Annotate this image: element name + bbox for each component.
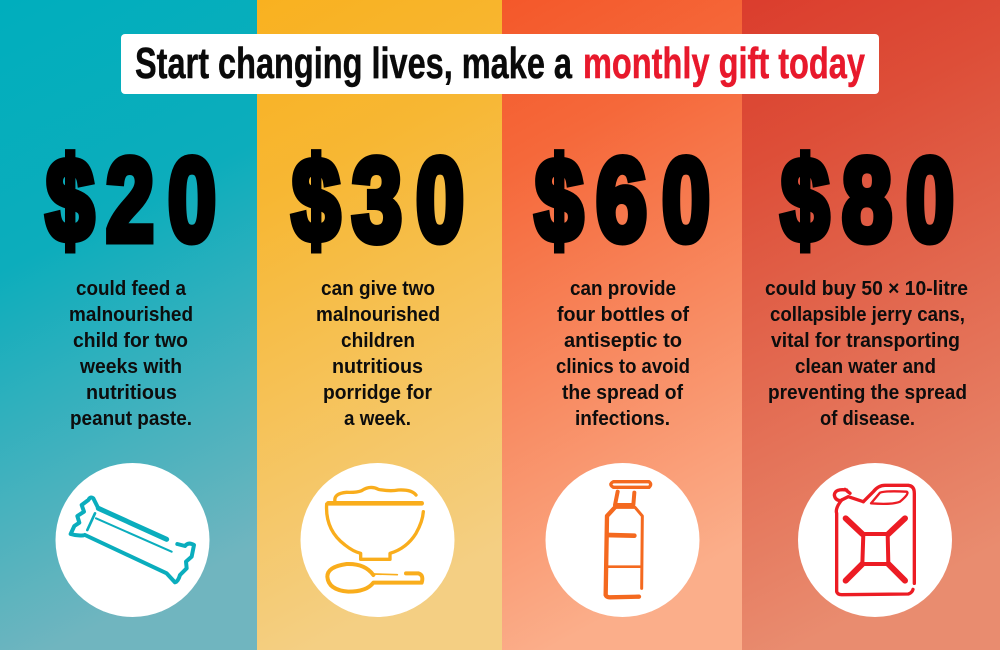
amount: $80 bbox=[781, 134, 954, 266]
text block: $80 description: clean water and bbox=[795, 356, 936, 378]
text block: $20 description: weeks with bbox=[79, 356, 182, 378]
title banner bbox=[121, 34, 879, 94]
panel: $30 column background bbox=[257, 0, 502, 650]
icon: jerry can bbox=[798, 463, 952, 617]
text block: $80 description: could buy 50 × 10-litre bbox=[765, 278, 968, 300]
text block: $80 description: vital for transporting bbox=[771, 330, 960, 352]
text block: $30 description: porridge for bbox=[323, 382, 432, 404]
amount: $30: $ bbox=[292, 134, 340, 266]
text block: $60 description: the spread of bbox=[562, 382, 683, 404]
amount: $20 bbox=[46, 134, 216, 266]
text block: $60 description bbox=[556, 278, 690, 430]
text block: $30 description: nutritious bbox=[332, 356, 423, 378]
text block: $20 description: peanut paste. bbox=[70, 408, 192, 430]
amount: $30 bbox=[292, 134, 464, 266]
amount: $30: 3 bbox=[352, 134, 402, 266]
panel: $60 column background bbox=[502, 0, 742, 650]
amount: $30: 0 bbox=[416, 134, 464, 266]
amount: $80: 8 bbox=[842, 134, 892, 266]
amount: $60: 6 bbox=[596, 134, 647, 266]
text block: $80 description: of disease. bbox=[820, 408, 915, 430]
text block: $80 description bbox=[765, 278, 968, 430]
icon: antiseptic bottle bbox=[546, 463, 700, 617]
icon: porridge bowl and spoon bbox=[300, 463, 454, 617]
text block: $80 description: collapsible jerry cans, bbox=[770, 304, 965, 326]
panel: $80 column background bbox=[742, 0, 1000, 650]
text block: $60 description: clinics to avoid bbox=[556, 356, 690, 378]
text block: $30 description: a week. bbox=[344, 408, 411, 430]
text block: $30 description: children bbox=[341, 330, 415, 352]
panel: $20 column background bbox=[0, 0, 257, 650]
text block: $20 description: malnourished bbox=[69, 304, 193, 326]
text block: $20 description: nutritious bbox=[86, 382, 177, 404]
text block: $60 description: four bottles of bbox=[557, 304, 689, 326]
text block: $60 description: antiseptic to bbox=[564, 330, 682, 352]
amount: $20: 2 bbox=[106, 134, 154, 266]
text block: $20 description bbox=[69, 278, 193, 430]
amount: $60: 0 bbox=[662, 134, 710, 266]
icon: peanut paste bar bbox=[56, 463, 210, 617]
title banner: monthly gift today bbox=[583, 39, 865, 88]
title banner: Start changing lives, make a bbox=[135, 39, 572, 88]
text block: $60 description: infections. bbox=[575, 408, 670, 430]
amount: $20: 0 bbox=[168, 134, 216, 266]
amount: $20: $ bbox=[46, 134, 94, 266]
text block: $30 description: can give two bbox=[321, 278, 435, 300]
text block: $30 description bbox=[316, 278, 440, 430]
text block: $20 description: could feed a bbox=[76, 278, 187, 300]
amount: $80: 0 bbox=[906, 134, 954, 266]
text block: $20 description: child for two bbox=[73, 330, 188, 352]
amount: $60 bbox=[535, 134, 710, 266]
text block: $80 description: preventing the spread bbox=[768, 382, 967, 404]
amount: $60: $ bbox=[535, 134, 583, 266]
text block: $60 description: can provide bbox=[570, 278, 676, 300]
amount: $80: $ bbox=[781, 134, 829, 266]
text block: $30 description: malnourished bbox=[316, 304, 440, 326]
